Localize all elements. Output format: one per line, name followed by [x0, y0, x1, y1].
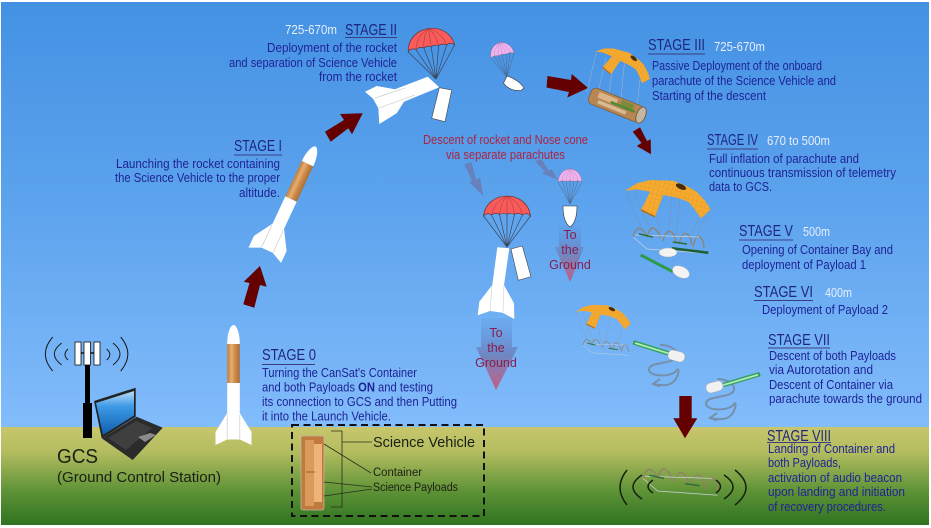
stage 0 text: its connection to GCS and then Putting [262, 395, 457, 409]
stage 0 text: and both Payloads ON and testing [262, 380, 433, 394]
stage VI text: Deployment of Payload 2 [762, 303, 888, 317]
to the ground arrow: nose cone [549, 225, 591, 282]
stage V text: deployment of Payload 1 [742, 258, 866, 272]
stage VII text: Descent of Container via [769, 378, 893, 392]
container under parafoil [576, 305, 631, 355]
stage VI text: STAGE VI [754, 284, 813, 301]
stage IV text: continuous transmission of telemetry [709, 166, 897, 180]
descent caption: via separate parachutes [446, 148, 565, 162]
nose cone descending under parachute [558, 169, 582, 227]
stage IV text: STAGE IV [707, 132, 758, 149]
stage IV text [707, 132, 897, 194]
stage II text: STAGE II [345, 22, 397, 39]
stage II text: Deployment of the rocket [267, 41, 397, 55]
stage 0 text: STAGE 0 [262, 347, 316, 364]
stage V text: 500m [803, 225, 830, 239]
stage IV text: data to GCS. [709, 180, 772, 194]
payload 1 released [641, 255, 673, 272]
stage III text: 725-670m [714, 40, 765, 54]
stage I text: Launching the rocket containing [116, 157, 280, 171]
to the ground arrow: rocket: Ground [475, 356, 517, 370]
ground control station [45, 337, 221, 486]
icon: container cylinder [587, 87, 648, 125]
arrow: to stage II [325, 113, 363, 142]
arrow: to landing [673, 396, 697, 438]
stage III text: Passive Deployment of the onboard [652, 59, 822, 73]
stage II text: and separation of Science Vehicle [229, 56, 397, 70]
stage VII text: parachute towards the ground [769, 392, 922, 406]
background: ground [1, 427, 929, 525]
legend leader lines [324, 431, 372, 507]
stage VII text: STAGE VII [768, 332, 830, 349]
rocket separating with parachute [365, 25, 459, 124]
arrow: to stage III [546, 74, 588, 98]
science vehicle with folded parafoil [587, 44, 655, 125]
stage VI text: 400m [825, 286, 852, 300]
stage VI text [754, 284, 888, 317]
landed container with audio beacon [620, 469, 746, 505]
GCS label: GCS [57, 446, 98, 468]
arrow: to stage I [243, 266, 267, 308]
stage VIII text: both Payloads, [768, 456, 841, 470]
stage 0 text: Turning the CanSat's Container [262, 366, 417, 380]
to the ground arrow: nose cone: To [563, 228, 577, 242]
stage II text: 725-670m [285, 23, 337, 37]
payload 2 attached [672, 248, 708, 253]
stage VIII text: Landing of Container and [768, 442, 895, 456]
rocket ascending [248, 139, 332, 263]
descent caption [423, 133, 588, 162]
panel: science vehicle legend [292, 425, 484, 516]
stage VIII text: STAGE VIII [767, 428, 831, 445]
stage VIII text [767, 428, 905, 514]
stage VIII text: of recovery procedures. [768, 500, 886, 514]
stage III text [648, 37, 836, 103]
stage VII text: Descent of both Payloads [769, 349, 896, 363]
icon: laptop [94, 388, 163, 460]
stage VIII text: upon landing and initiation [768, 485, 905, 499]
rocket descending under parachute [478, 196, 531, 319]
stage I text: the Science Vehicle to the proper [115, 171, 280, 185]
stage IV text: Full inflation of parachute and [709, 152, 859, 166]
stage VII text [768, 332, 922, 406]
GCS full name: (Ground Control Station) [57, 469, 221, 486]
arrow: to nose cone descent [535, 159, 558, 180]
to the ground arrow: nose cone: the [561, 243, 579, 257]
arrow: to rocket descent [464, 162, 483, 196]
stage 0 text: it into the Launch Vehicle. [262, 410, 391, 424]
to the ground arrow: rocket [475, 318, 518, 390]
container label: Container [373, 467, 422, 479]
arrow: to stage IV [633, 127, 651, 154]
to the ground arrow: rocket: To [489, 326, 503, 340]
stage V text: STAGE V [739, 223, 794, 240]
stage V text: Opening of Container Bay and [742, 243, 893, 257]
stage VIII text: activation of audio beacon [768, 471, 902, 485]
stage III text: parachute of the Science Vehicle and [652, 74, 836, 88]
stage I text: STAGE I [234, 138, 282, 155]
icon: antenna tower [45, 337, 128, 438]
fully inflated parafoil with payload release [625, 180, 711, 281]
stage VII text: via Autorotation and [769, 363, 873, 377]
nose cone with pink parachute [488, 40, 524, 91]
stage V text [739, 223, 893, 272]
stage II text [229, 22, 397, 84]
stage I text [115, 138, 282, 200]
to the ground arrow: nose cone: Ground [549, 258, 591, 272]
payload 2 autorotating [705, 374, 760, 420]
stage II text: from the rocket [319, 70, 397, 84]
science payloads label: Science Payloads [373, 482, 458, 494]
stage IV text: 670 to 500m [767, 134, 830, 148]
payload 1 autorotating [633, 342, 686, 386]
icon: container with payloads [301, 436, 324, 510]
rocket on launch pad [216, 325, 252, 445]
stage III text: STAGE III [648, 37, 705, 54]
descent caption: Descent of rocket and Nose cone [423, 133, 588, 147]
stage 0 text [262, 347, 457, 424]
stage I text: altitude. [239, 186, 280, 200]
science vehicle label: Science Vehicle [373, 434, 475, 451]
to the ground arrow: rocket: the [487, 341, 505, 355]
stage III text: Starting of the descent [652, 89, 766, 103]
